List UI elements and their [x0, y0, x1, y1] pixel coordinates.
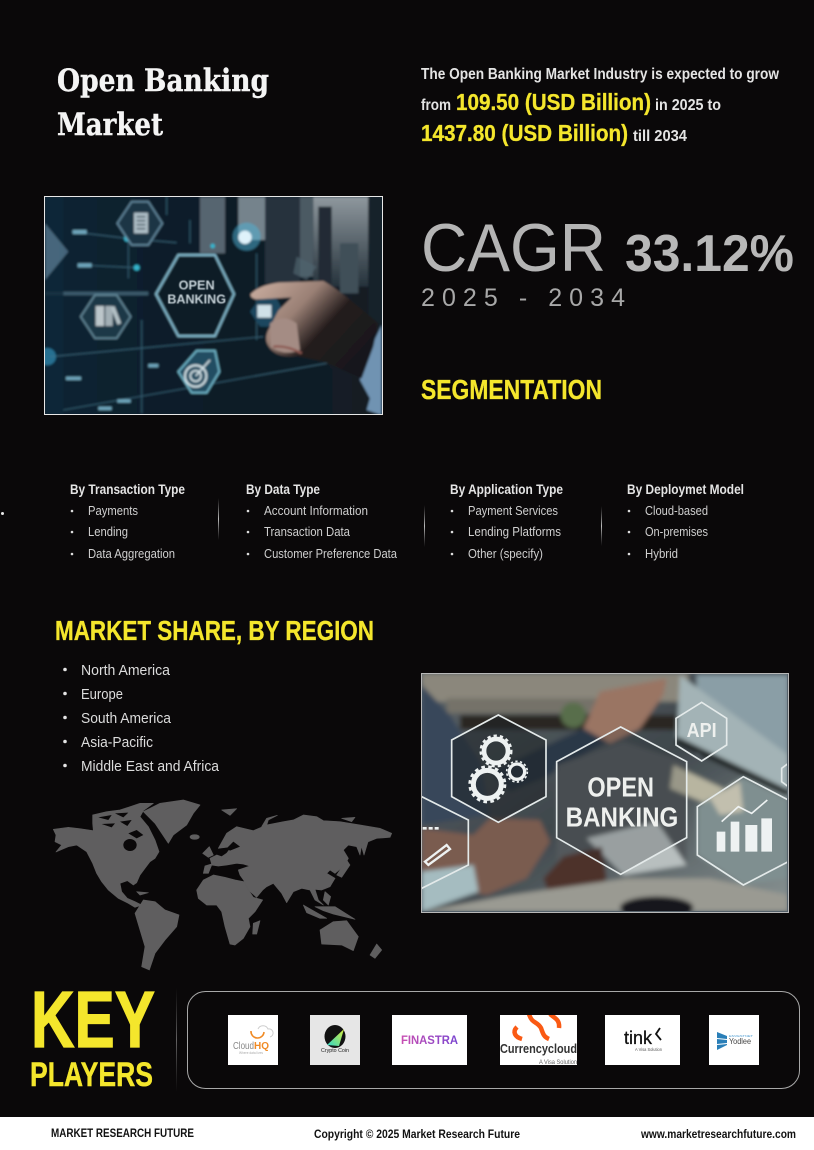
logo: Crypto Coin — [310, 1015, 360, 1065]
image: open banking touch screen: OPEN — [179, 277, 215, 292]
logo: CloudHQ — [228, 1015, 278, 1065]
image: open banking touch screen: BANKING — [167, 291, 226, 306]
segment: by application type: Other (specify) — [468, 547, 543, 561]
segment: by data type: By Data Type — [246, 481, 320, 497]
CAGR callout: 2025 - 2034 — [421, 284, 625, 312]
logo: Yodlee: ENVESTNET — [729, 1034, 753, 1038]
logo: Yodlee — [709, 1015, 759, 1065]
logo: Tink — [605, 1015, 680, 1065]
market growth statement: in 2025 to — [655, 97, 721, 114]
logo: CloudHQ: HQ — [254, 1041, 269, 1052]
title — [57, 63, 269, 143]
footer: Copyright © 2025 Market Research Future — [314, 1127, 520, 1141]
segment: by transaction type: By Transaction Type — [70, 481, 185, 497]
key players heading: KEY — [31, 975, 155, 1064]
heading: segmentation: SEGMENTATION — [421, 374, 602, 405]
world map — [53, 800, 392, 970]
segment: by data type: Transaction Data — [264, 525, 350, 539]
key players panel — [188, 992, 800, 1088]
logo: CloudHQ: Cloud — [233, 1041, 254, 1052]
segment: by deployment model: On-premises — [645, 525, 708, 539]
footer: MARKET RESEARCH FUTURE — [51, 1126, 194, 1140]
image: open banking hexagons over desk: API — [687, 720, 717, 742]
logo: Finastra — [392, 1015, 467, 1065]
logo: Tink: tink — [624, 1028, 653, 1048]
market growth statement: till 2034 — [633, 128, 687, 145]
image: open banking hexagons over desk: BANKING — [566, 801, 678, 832]
image: open banking hexagons over desk: OPEN — [587, 771, 654, 802]
logo: Currencycloud: Currencycloud — [500, 1042, 577, 1056]
segment: by data type — [246, 481, 397, 561]
region list: Europe — [81, 686, 123, 703]
logo: Finastra: FINASTRA — [401, 1035, 458, 1047]
segment: by transaction type: Lending — [88, 525, 128, 539]
region list: South America — [81, 710, 172, 727]
segment: by deployment model: Hybrid — [645, 547, 678, 561]
market growth statement — [421, 66, 780, 146]
segment: by data type: Account Information — [264, 504, 368, 518]
segment: by deployment model — [627, 481, 744, 561]
segment: by deployment model: Cloud-based — [645, 504, 708, 518]
key players heading — [30, 975, 155, 1094]
segment: by application type: Lending Platforms — [468, 525, 561, 539]
decorative dot — [1, 512, 4, 515]
region list: Middle East and Africa — [81, 758, 220, 775]
segment: by deployment model: By Deploymet Model — [627, 481, 744, 497]
title: Market — [57, 107, 164, 143]
market growth statement: 109.50 (USD Billion) — [456, 89, 651, 115]
title: Open Banking — [57, 63, 269, 99]
image: open banking touch screen — [39, 196, 383, 415]
key players heading: PLAYERS — [30, 1056, 153, 1094]
segment: by transaction type: Payments — [88, 504, 138, 518]
CAGR callout: 33.12% — [625, 225, 794, 283]
logo: Currencycloud — [500, 1014, 577, 1066]
logo: CloudHQ: Where data lives — [239, 1051, 263, 1055]
image: open banking hexagons over desk — [422, 673, 788, 919]
segment: by application type — [450, 481, 563, 561]
segment: by transaction type — [70, 481, 185, 561]
CAGR callout — [421, 210, 794, 312]
logo: Crypto Coin: Crypto Coin — [321, 1048, 349, 1054]
CAGR callout: CAGR — [421, 210, 606, 286]
segment: by application type: By Application Type — [450, 481, 563, 497]
market growth statement: 1437.80 (USD Billion) — [421, 120, 628, 146]
segment: by transaction type: Data Aggregation — [88, 547, 175, 561]
heading: market share by region: MARKET SHARE, BY REGION — [55, 615, 374, 646]
region list: Asia-Pacific — [81, 734, 153, 751]
market growth statement: from — [421, 97, 451, 114]
footer — [0, 1117, 814, 1150]
logo: Currencycloud: A Visa Solution — [539, 1059, 577, 1066]
logo: Tink: A Visa Solution — [635, 1047, 662, 1052]
region list — [63, 662, 220, 775]
segment: by data type: Customer Preference Data — [264, 547, 397, 561]
logo: Yodlee: Yodlee — [729, 1037, 751, 1046]
region list: North America — [81, 662, 171, 679]
segment: by application type: Payment Services — [468, 504, 558, 518]
